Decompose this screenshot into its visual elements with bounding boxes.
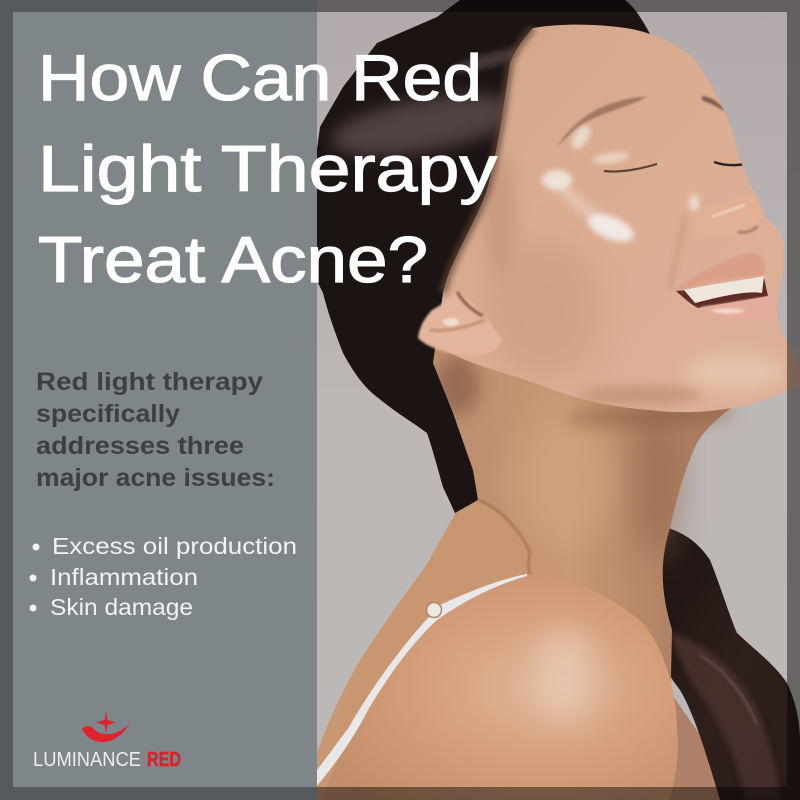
bullet list (30, 533, 297, 620)
face (430, 20, 800, 420)
photo dark frame (317, 0, 800, 800)
intro text block: specifically (36, 400, 180, 428)
ear (418, 290, 502, 355)
bullet list: Skin damage (50, 594, 193, 620)
title: Treat Acne? (38, 223, 428, 296)
title (38, 41, 498, 296)
cheek and jaw shading (490, 248, 602, 376)
title: Light Therapy (38, 132, 498, 205)
hair sheen (327, 88, 504, 162)
hair (310, 0, 660, 520)
icon: red star and crescent (82, 711, 129, 742)
nose (691, 194, 762, 238)
closed eyes (604, 164, 657, 172)
panel: left grey text panel (0, 0, 317, 800)
logo: Luminance Red (33, 711, 181, 771)
bullet list: Excess oil production (52, 533, 297, 559)
photo: woman in profile with eyes closed (310, 0, 800, 800)
logo wordmark: LUMINANCE (33, 749, 141, 771)
lower lip (700, 295, 778, 314)
intro text block: major acne issues: (36, 464, 275, 492)
eyebrow (557, 97, 647, 147)
title: How Can Red (38, 41, 482, 114)
neck (433, 348, 731, 682)
braid (650, 528, 800, 800)
bullet list: Inflammation (50, 564, 198, 590)
mouth shadow (676, 278, 768, 308)
skin highlights (556, 186, 604, 220)
upper lip (673, 253, 765, 290)
intro text block (36, 368, 275, 492)
white bra strap with clasp (317, 574, 527, 786)
shoulder and upper back (317, 500, 678, 800)
photo background (317, 12, 787, 122)
skin behind braid (670, 698, 720, 800)
intro text block: addresses three (36, 432, 244, 460)
hairline fringe (443, 28, 533, 293)
intro text block: Red light therapy (36, 368, 263, 396)
neck shading (436, 355, 735, 560)
teeth (684, 276, 764, 303)
logo wordmark: RED (147, 749, 181, 771)
